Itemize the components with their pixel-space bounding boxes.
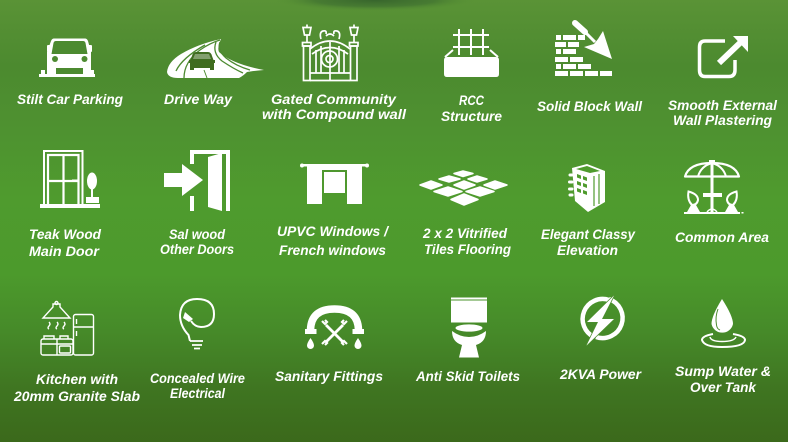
feature: Kitchen with 20mm Granite Slab (13, 302, 140, 404)
icon: pipe and wrenches (305, 309, 364, 349)
icon: door with plant (40, 151, 100, 208)
label: Sal wood (169, 227, 226, 242)
label: 2 x 2 Vitrified (422, 226, 508, 241)
icon: toilet (451, 298, 487, 358)
feature: UPVC Windows / French windows (277, 164, 389, 258)
label line 2: with Compound wall (262, 107, 406, 122)
label: Drive Way (164, 92, 234, 107)
icon: bulb with plug (180, 299, 214, 348)
icon: external arrow box (700, 36, 748, 76)
label line 2: Structure (441, 109, 502, 124)
label line 2: Wall Plastering (673, 113, 773, 128)
icon: building (570, 164, 605, 212)
feature: Drive Way (164, 39, 264, 107)
icon: road with car (167, 39, 264, 78)
label: 2KVA Power (559, 367, 642, 382)
feature: Smooth External Wall Plastering (668, 36, 777, 128)
feature: Teak Wood Main Door (29, 151, 102, 259)
feature: 2KVA Power (559, 296, 642, 382)
icon: kitchen (41, 302, 94, 355)
label: Concealed Wire (150, 371, 245, 386)
label: Stilt Car Parking (17, 92, 124, 107)
label line 2: 20mm Granite Slab (13, 389, 140, 404)
label line 2: Other Doors (160, 242, 234, 257)
feature: Stilt Car Parking (17, 38, 124, 107)
feature: Sanitary Fittings (275, 309, 384, 384)
label line 2: Electrical (170, 386, 225, 401)
label: Common Area (675, 230, 770, 245)
label: Kitchen with (36, 372, 118, 387)
feature: RCC Structure (441, 29, 502, 124)
feature: Anti Skid Toilets (415, 298, 520, 384)
icon: car (39, 38, 95, 77)
label line 2: Tiles Flooring (424, 242, 512, 257)
label: Smooth External (668, 98, 777, 113)
icon: patio umbrella and chairs (684, 160, 744, 214)
feature: Solid Block Wall (537, 23, 642, 114)
feature: 2 x 2 Vitrified Tiles Flooring (420, 171, 512, 257)
label: UPVC Windows / (277, 224, 389, 239)
icon: water drop (702, 299, 745, 347)
label: Gated Community (271, 92, 398, 107)
feature: Sal wood Other Doors (160, 150, 234, 257)
label: Anti Skid Toilets (415, 369, 520, 384)
label: Sanitary Fittings (275, 369, 384, 384)
icon: reinforced concrete (444, 29, 499, 77)
icon: lightning in circle (583, 296, 623, 346)
icon: bricks and trowel (555, 23, 612, 76)
label: Teak Wood (29, 227, 102, 242)
label: Elegant Classy (541, 227, 636, 242)
label: Solid Block Wall (537, 99, 642, 114)
feature: Concealed Wire Electrical (150, 299, 245, 401)
icon: window with curtains (300, 164, 369, 204)
label line 2: Main Door (29, 244, 100, 259)
label line 2: French windows (279, 243, 386, 258)
feature: Common Area (675, 160, 770, 245)
feature: Elegant Classy Elevation (541, 164, 636, 258)
icon: door with arrow (164, 150, 230, 211)
label: RCC (459, 93, 484, 108)
icon: gate (302, 24, 358, 80)
label: Sump Water & (675, 364, 771, 379)
label line 2: Elevation (557, 243, 618, 258)
feature: Sump Water & Over Tank (675, 299, 771, 395)
icon: floor tiles (420, 171, 507, 205)
label line 2: Over Tank (690, 380, 758, 395)
feature: Gated Community with Compound wall (262, 24, 406, 122)
